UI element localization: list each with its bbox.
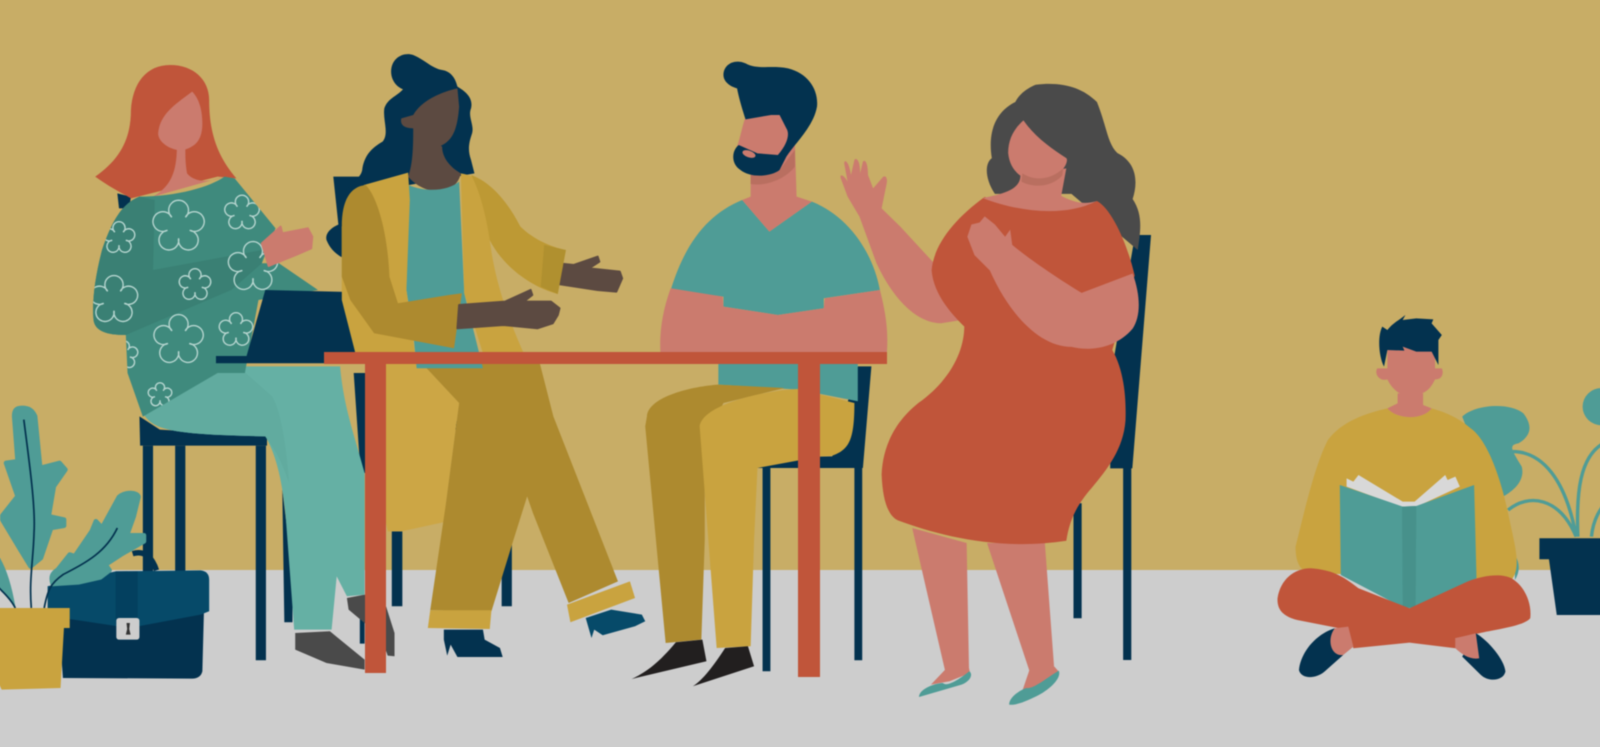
- boy: hair: [1379, 315, 1442, 367]
- tablet: [216, 290, 376, 363]
- man: shoes: [632, 640, 754, 686]
- third woman: face: [1008, 120, 1067, 186]
- table: [324, 352, 887, 677]
- first woman: trousers: [143, 366, 365, 630]
- man: [632, 62, 887, 686]
- briefcase: handle: [133, 553, 156, 570]
- right plant: stems: [1508, 443, 1600, 537]
- first woman: front shoe: [295, 631, 365, 670]
- right plant: far leaf: [1583, 388, 1600, 425]
- second woman: lower hand: [457, 290, 559, 328]
- second woman: trouser cuffs: [428, 581, 635, 629]
- first woman: raised hand: [262, 227, 312, 266]
- boy: ankles: [1330, 627, 1479, 659]
- first woman: neck and chest: [153, 147, 224, 197]
- right plant: [1462, 388, 1600, 615]
- third woman: neck and chest: [983, 168, 1097, 211]
- second woman: left sleeve: [342, 185, 462, 348]
- briefcase: clasp: [116, 618, 139, 640]
- boy: open book: [1340, 485, 1477, 608]
- left plant: [0, 408, 144, 690]
- boy: neck: [1387, 393, 1432, 417]
- first woman: face: [158, 92, 202, 150]
- briefcase: body: [58, 606, 204, 679]
- second woman: sleeve cuff: [541, 245, 566, 294]
- left plant: stems: [0, 420, 117, 608]
- right plant: leaves: [1462, 406, 1529, 580]
- first woman: flower pattern: [90, 195, 278, 406]
- third woman: dress: [882, 197, 1135, 544]
- background wall: [0, 0, 1600, 570]
- briefcase: strap: [116, 571, 138, 625]
- third woman: [840, 84, 1140, 705]
- third woman: hair: [987, 84, 1140, 250]
- second woman: trousers: [422, 363, 618, 611]
- chair: man: [757, 366, 871, 671]
- second woman: teal top: [406, 182, 483, 368]
- second woman: heels: [444, 610, 645, 657]
- first woman: hair: [95, 65, 236, 198]
- first woman: hand on tablet: [347, 310, 369, 338]
- boy: book pages: [1347, 475, 1460, 510]
- third woman: arm across chest: [967, 216, 1139, 349]
- first woman: [90, 65, 395, 670]
- third woman: shoes: [919, 666, 1059, 705]
- man: trousers: [645, 385, 854, 648]
- boy: sweater: [1296, 408, 1517, 580]
- man: hair and beard: [723, 62, 817, 176]
- left plant: leaves: [0, 408, 144, 606]
- second woman: [342, 88, 645, 657]
- man: face: [737, 114, 790, 157]
- chair: second woman: [333, 177, 512, 644]
- man: teal shirt: [671, 200, 880, 401]
- chair: first woman: [117, 193, 292, 660]
- man: crossed arms: [660, 288, 887, 355]
- third woman: raised arm and hand: [840, 159, 962, 323]
- right plant: pot: [1539, 538, 1600, 615]
- second woman: neck: [408, 127, 461, 191]
- boy: crossed legs: [1277, 568, 1530, 648]
- floor: [0, 570, 1600, 747]
- chair: third woman: [1073, 235, 1151, 660]
- second woman: upper hand: [553, 257, 622, 292]
- left plant: pot: [0, 608, 70, 690]
- boy reading: [1277, 315, 1530, 680]
- briefcase: [48, 553, 209, 679]
- second woman: cardigan skirt: [367, 360, 459, 531]
- second woman: hair: [326, 54, 474, 257]
- boy: face: [1376, 347, 1443, 397]
- man: neck: [742, 143, 812, 232]
- second woman: cardigan: [342, 173, 565, 353]
- briefcase: flap: [48, 570, 209, 628]
- first woman: sweater: [93, 177, 318, 417]
- second woman: face: [401, 88, 459, 147]
- man: mouth: [741, 149, 757, 159]
- third woman: legs: [912, 528, 1054, 671]
- first woman: back shoe: [347, 595, 395, 656]
- boy: shoes: [1299, 628, 1505, 680]
